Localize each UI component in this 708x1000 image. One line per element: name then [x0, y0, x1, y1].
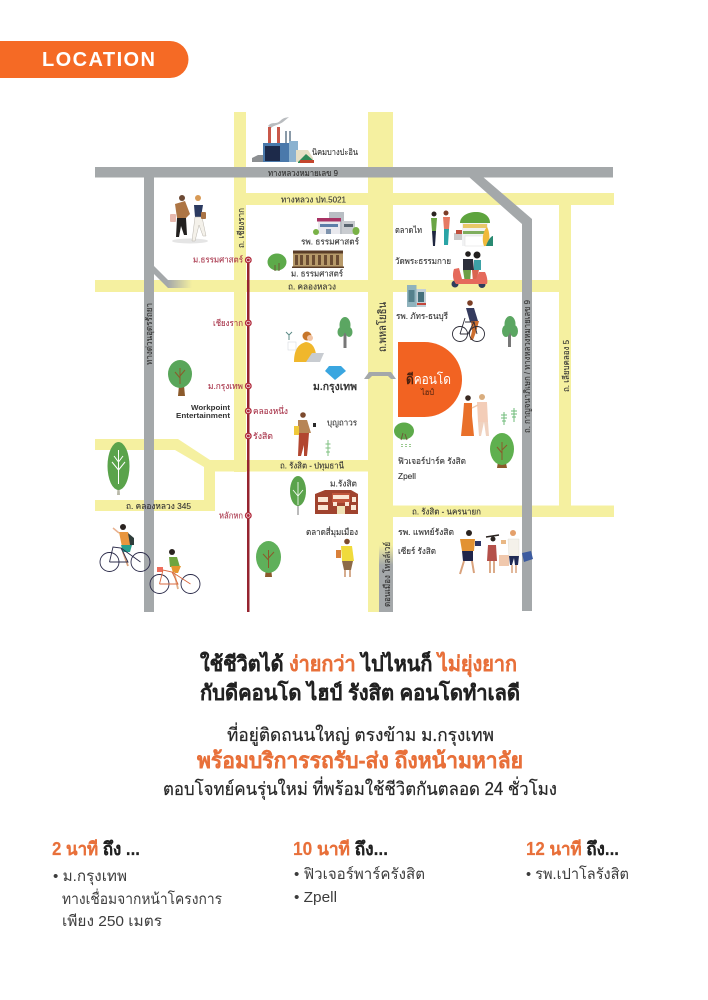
icon: woman with backpack: [294, 412, 330, 456]
road labels: ทางหลวงหมายเลข 9: [268, 168, 338, 178]
station labels: หลักหก: [219, 510, 243, 520]
place labels: ตลาดไท: [395, 225, 422, 235]
icon: cyclist woman: [150, 549, 200, 594]
icon: bush: [268, 254, 286, 271]
place labels: รพ. ธรรมศาสตร์: [301, 236, 359, 246]
icon: tree right: [502, 316, 518, 347]
icon: leaf tree: [290, 476, 306, 515]
place labels: Zpell: [398, 471, 416, 481]
road labels: ถ. คลองหลวง 345: [126, 501, 191, 511]
place labels: รพ. แพทย์รังสิต: [398, 527, 454, 537]
road labels: ทางหลวง ปท.5021: [281, 194, 346, 204]
icon: thammasat university: [292, 250, 344, 268]
icon: cyclist: [452, 300, 484, 342]
station labels: คลองหนึ่ง: [253, 405, 288, 416]
headline: กับดีคอนโด ไฮป์ รังสิต คอนโดทำเลดี: [200, 680, 520, 705]
travel time: 10 minutes: • Zpell: [294, 889, 337, 906]
station labels: ม.ธรรมศาสตร์: [193, 254, 243, 264]
location tag: [0, 41, 188, 78]
road labels: ถ. เลียบคลอง 5: [561, 340, 571, 392]
road labels: ถ. เชียงราก: [236, 208, 246, 248]
project badge: ดีคอนโด: [406, 371, 451, 387]
travel time: 2 minutes: ทางเชื่อมจากหน้าโครงการ: [62, 888, 222, 908]
icon: woman with laptop: [286, 332, 324, 362]
connector to project: [364, 372, 396, 379]
place labels: ม. ธรรมศาสตร์: [291, 268, 343, 278]
road labels: ทางด่วนอุดรรัถยา: [144, 303, 155, 365]
travel time: 12 minutes: • รพ.เปาโลรังสิต: [526, 865, 629, 883]
travel time: 10 minutes: • ฟิวเจอร์พาร์ครังสิต: [294, 866, 425, 883]
place labels: เซียร์ รังสิต: [398, 546, 436, 556]
station labels: [193, 254, 288, 520]
road labels: ถ. รังสิต - นครนายก: [412, 506, 481, 516]
travel time: 2 minutes: • ม.กรุงเทพ: [53, 868, 127, 886]
place labels: บุญถาวร: [327, 418, 357, 428]
travel time: 10 minutes: 10 นาที ถึง...: [293, 839, 388, 859]
icon: hospital block: [407, 285, 426, 307]
road labels: ถ.พหลโยธิน: [375, 302, 389, 352]
travel time: 10 minutes: [293, 839, 425, 906]
description: ที่อยู่ติดถนนใหญ่ ตรงข้าม ม.กรุงเทพ: [227, 722, 494, 746]
place labels: ตลาดสี่มุมเมือง: [306, 526, 358, 538]
icon: small plants: [501, 408, 517, 425]
icon: tree left: [168, 360, 192, 396]
icon: cyclist man: [100, 524, 150, 572]
icon: shoppers and market: [431, 210, 493, 246]
icon: tall tree: [108, 442, 130, 495]
travel time: 2 minutes: เพียง 250 เมตร: [62, 913, 162, 930]
place labels: Workpoint: [191, 405, 231, 412]
place labels: ม.กรุงเทพ: [313, 381, 357, 394]
description: [163, 722, 557, 800]
place labels: Entertainment: [176, 413, 231, 420]
icon: bush near park: [394, 422, 414, 447]
place labels: วัดพระธรรมกาย: [395, 256, 451, 266]
road labels: ถ. รังสิต - ปทุมธานี: [280, 460, 344, 472]
icon: scooter couple: [452, 251, 487, 288]
place labels: ม.รังสิต: [330, 478, 357, 488]
project badge: ไฮป์: [420, 387, 434, 397]
description: พร้อมบริการรถรับ-ส่ง ถึงหน้ามหาลัย: [197, 748, 523, 773]
rail stations: [246, 257, 251, 518]
travel time: 2 minutes: [52, 839, 222, 930]
headline: ใช้ชีวิตได้ ง่ายกว่า ไปไหนก็ ไม่ยุ่งยาก: [200, 650, 517, 678]
icon: diamond: [325, 366, 346, 380]
icon: factory: [252, 117, 314, 163]
station labels: ม.กรุงเทพ: [208, 381, 243, 392]
icon: tree: [338, 317, 352, 348]
headline: [200, 650, 520, 705]
road labels: [126, 168, 571, 607]
travel time: 2 minutes: 2 นาที ถึง ...: [52, 839, 140, 859]
map: [95, 112, 614, 612]
yellow roads: [95, 112, 614, 612]
icon: hospital: [313, 212, 360, 235]
station labels: เชียงราก: [213, 318, 243, 328]
road labels: ดอนเมือง โทลล์เวย์: [382, 542, 392, 607]
project badge: [398, 342, 462, 417]
icon: walking couple: [170, 195, 208, 244]
icon: shopping family: [460, 530, 533, 574]
place labels: [176, 147, 466, 556]
place labels: ฟิวเจอร์ปาร์ค รังสิต: [398, 456, 466, 466]
icon: two women: [461, 394, 489, 436]
icon: rangsit building: [315, 490, 358, 514]
station labels: รังสิต: [253, 431, 273, 441]
place labels: นิคมบางปะอิน: [312, 147, 358, 157]
icon: tree near park: [490, 433, 514, 468]
icon: tree south: [256, 541, 281, 577]
place labels: รพ. ภัทร-ธนบุรี: [396, 311, 448, 322]
road labels: ถ. กาญจนาภิเษก / ทางหลวงหมายเลข 9: [522, 300, 532, 433]
description: ตอบโจทย์คนรุ่นใหม่ ที่พร้อมใช้ชีวิตกันตลอด 24 ชั่วโมง: [163, 776, 557, 800]
grey roads: [95, 167, 613, 612]
icon: man in yellow shirt: [336, 539, 354, 577]
road labels: ถ. คลองหลวง: [288, 282, 336, 292]
travel time: 12 minutes: [526, 839, 629, 883]
travel time: 12 minutes: 12 นาที ถึง...: [526, 839, 619, 859]
location tag: LOCATION: [42, 49, 155, 71]
rail line: [247, 260, 250, 612]
